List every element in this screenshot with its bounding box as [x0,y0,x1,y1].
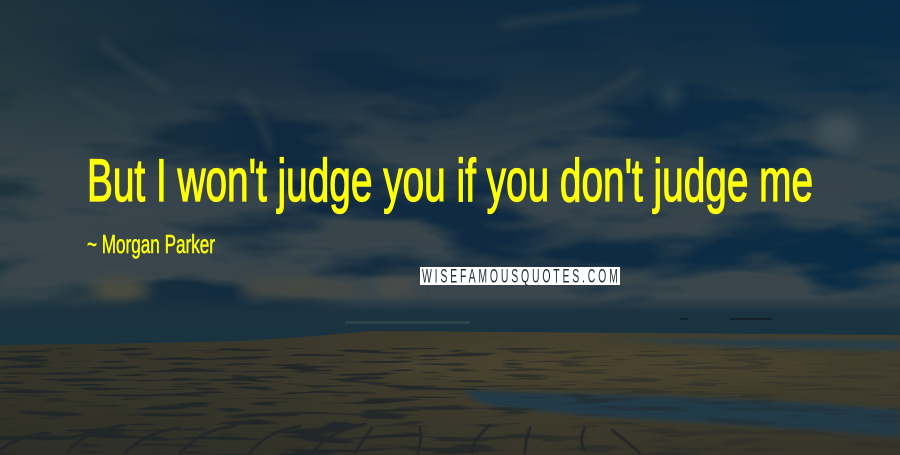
background: large ripples in foreground [0,424,640,453]
background: night sky with clouds [0,0,900,330]
background: sand beach [0,331,900,455]
background: sand ripple texture [0,348,900,455]
background: upper water strip [603,338,900,350]
author attribution: ~ Morgan Parker [87,229,215,259]
background: tidal pool [465,390,900,437]
watermark badge: WISEFAMOUSQUOTES.COM [422,266,618,287]
background: sea at horizon [0,296,900,350]
